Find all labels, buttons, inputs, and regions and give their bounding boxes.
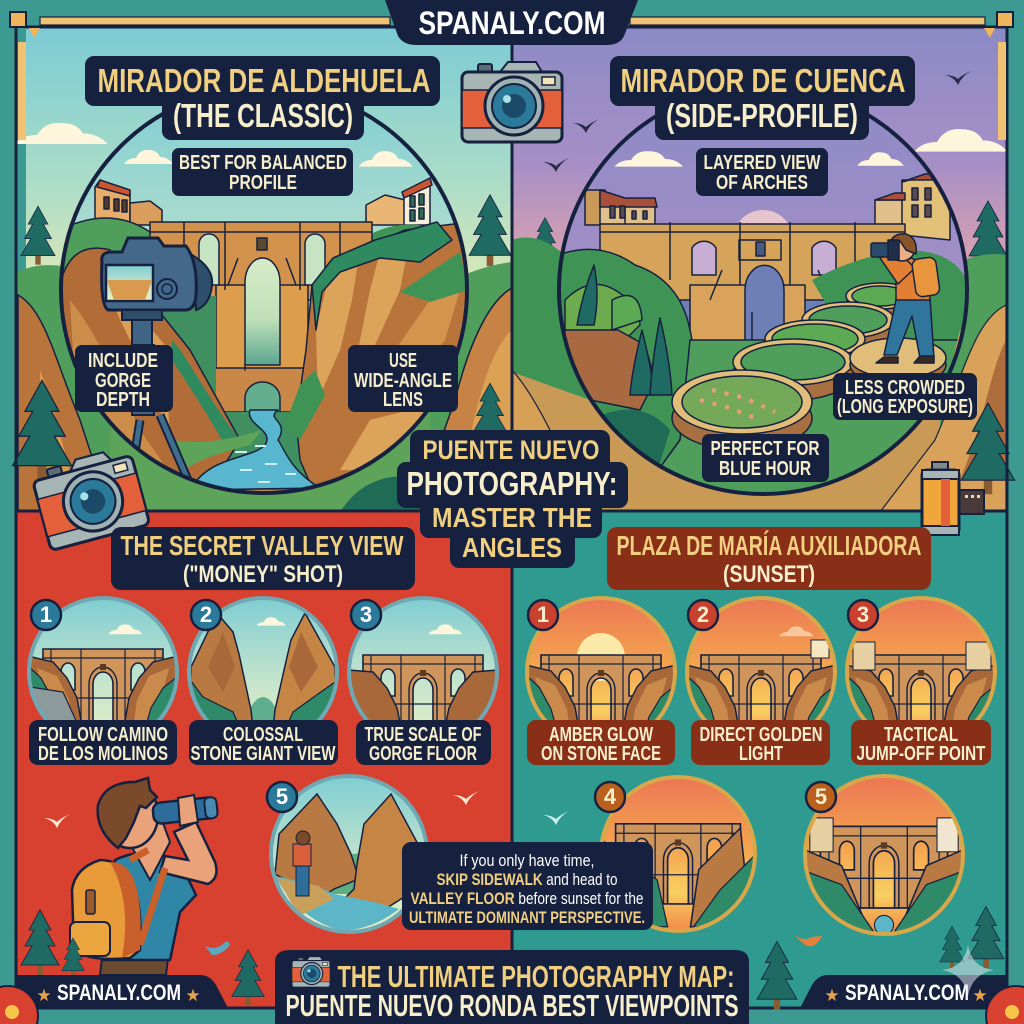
bottom banner: THE ULTIMATE PHOTOGRAPHY MAP: xyxy=(338,959,734,994)
caption: direct golden light xyxy=(691,720,830,765)
step circle: sunset 3 xyxy=(845,596,997,720)
icon: trees bottom xyxy=(21,907,1004,1010)
label: best for balanced profile: BEST FOR BALANCED xyxy=(179,152,347,174)
bottom banner xyxy=(275,950,749,1024)
bottom-right brand tag xyxy=(800,975,1024,1024)
caption: amber glow xyxy=(527,720,675,765)
illustration: hiker with binoculars xyxy=(70,778,218,975)
bottom-left brand tag xyxy=(0,975,228,1024)
callout: VALLEY FLOOR before sunset for the xyxy=(410,889,644,908)
heading: The Secret Valley View: THE SECRET VALLEY VIEW xyxy=(120,530,404,561)
gorge floor greenery xyxy=(160,296,310,490)
label: include gorge depth: DEPTH xyxy=(96,389,150,411)
label: use wide-angle lens xyxy=(348,345,458,412)
caption: direct golden light: LIGHT xyxy=(739,743,783,765)
step circle: valley 3 xyxy=(347,596,499,720)
label: less crowded: LESS CROWDED xyxy=(845,377,965,399)
label: layered view of arches: LAYERED VIEW xyxy=(704,152,821,174)
step circle: sunset 2 xyxy=(685,596,837,720)
caption: amber glow: ON STONE FACE xyxy=(541,743,661,765)
icon: birds xyxy=(44,791,822,955)
caption: amber glow: AMBER GLOW xyxy=(549,724,653,746)
step badges: sunset: 5 xyxy=(815,784,827,809)
circle scene: Cuenca view xyxy=(558,85,970,495)
panel: Mirador de Aldehuela scene xyxy=(13,28,512,512)
right gorge cliff xyxy=(296,222,470,495)
top brand tab xyxy=(385,0,638,45)
label: perfect for blue hour: PERFECT FOR xyxy=(710,438,820,460)
left town buildings xyxy=(95,180,162,225)
label: include gorge depth: INCLUDE xyxy=(88,350,158,372)
bottom-left brand tag: SPANALY.COM xyxy=(57,980,181,1005)
heading: The Secret Valley View xyxy=(111,527,415,590)
callout xyxy=(402,842,653,930)
step badges: valley: 3 xyxy=(360,602,372,627)
buildings xyxy=(585,190,657,225)
callout: SKIP SIDEWALK and head to xyxy=(436,870,618,889)
label: layered view of arches: OF ARCHES xyxy=(716,172,808,194)
bottom-right brand tag: SPANALY.COM xyxy=(845,980,969,1005)
step circle: sunset 5 xyxy=(804,776,964,934)
tripod camera xyxy=(102,238,212,484)
heading: Mirador de Aldehuela xyxy=(85,56,440,140)
heading: central title: PUENTE NUEVO xyxy=(422,435,600,465)
icon: top camera xyxy=(462,62,562,142)
caption: tactical jump-off: TACTICAL xyxy=(884,724,958,746)
heading: Mirador de Cuenca: (SIDE-PROFILE) xyxy=(666,97,858,134)
caption: tactical jump-off: JUMP-OFF POINT xyxy=(856,743,986,765)
step badges: valley xyxy=(31,600,381,812)
heading: The Secret Valley View: ("MONEY" SHOT) xyxy=(183,561,343,588)
heading: Mirador de Aldehuela: MIRADOR DE ALDEHUELA xyxy=(98,62,430,99)
caption: follow camino: DE LOS MOLINOS xyxy=(38,743,168,765)
step circle: valley 1 xyxy=(27,596,179,720)
heading: Mirador de Aldehuela: (THE CLASSIC) xyxy=(173,97,353,134)
label: best for balanced profile: PROFILE xyxy=(229,172,297,194)
step badges: sunset: 4 xyxy=(604,784,617,809)
label: include gorge depth xyxy=(75,345,173,412)
person xyxy=(871,234,940,363)
left greenery xyxy=(561,248,693,464)
step badges: sunset xyxy=(528,600,878,812)
step badges: valley: 2 xyxy=(200,602,212,627)
caption: colossal xyxy=(189,720,338,765)
icon: birds purple sky xyxy=(543,71,971,172)
terraces xyxy=(672,283,946,450)
circle scene: Aldehuela view xyxy=(60,85,470,500)
caption: direct golden light: DIRECT GOLDEN xyxy=(700,724,822,746)
caption: follow camino xyxy=(29,720,177,765)
heading: Plaza de María Auxiliadora: (SUNSET) xyxy=(723,561,815,588)
bridge xyxy=(150,222,372,412)
caption: follow camino: FOLLOW CAMINO xyxy=(38,724,168,746)
heading: Plaza de María Auxiliadora xyxy=(607,527,931,590)
label: best for balanced profile xyxy=(172,148,353,196)
left gorge cliff xyxy=(60,248,240,495)
icon: film canister xyxy=(922,462,984,535)
label: include gorge depth: GORGE xyxy=(95,370,151,392)
heading: central title: MASTER THE xyxy=(432,502,592,533)
caption: true scale xyxy=(356,720,491,765)
step badges: sunset: 2 xyxy=(697,602,709,627)
heading: central title: PHOTOGRAPHY: xyxy=(406,465,618,502)
right lower ground xyxy=(661,339,958,492)
bottom banner: PUENTE NUEVO RONDA BEST VIEWPOINTS xyxy=(286,988,738,1023)
caption: colossal: STONE GIANT VIEW xyxy=(190,743,336,765)
bottom-left brand tag: ★ xyxy=(36,986,52,1006)
bridge xyxy=(600,222,905,345)
heading: Mirador de Cuenca: MIRADOR DE CUENCA xyxy=(620,62,906,99)
right town buildings xyxy=(366,178,432,225)
step circle: valley 2 xyxy=(187,596,339,720)
caption: colossal: COLOSSAL xyxy=(223,724,303,746)
callout: If you only have time, xyxy=(460,851,594,870)
label: use wide-angle lens: LENS xyxy=(383,389,423,411)
label: use wide-angle lens: USE xyxy=(389,350,417,372)
step badges: sunset: 3 xyxy=(857,602,869,627)
bottom-right brand tag: ★ xyxy=(824,986,840,1006)
caption: true scale: GORGE FLOOR xyxy=(369,743,477,765)
heading: central title: ANGLES xyxy=(462,532,562,563)
panel: Secret Valley red background xyxy=(17,512,512,1008)
panel: Plaza de María Auxiliadora teal background xyxy=(512,512,1006,1008)
caption: tactical jump-off xyxy=(851,720,991,765)
label: layered view of arches xyxy=(696,148,828,196)
step circle: sunset 4 xyxy=(600,777,756,931)
icon: lower-left camera xyxy=(30,445,150,551)
label: less crowded xyxy=(833,373,977,420)
step badges: valley: 1 xyxy=(40,602,52,627)
step badges: valley: 5 xyxy=(276,784,288,809)
heading: Mirador de Cuenca xyxy=(610,56,915,140)
bottom-right brand tag: ★ xyxy=(972,986,988,1006)
label: perfect for blue hour: BLUE HOUR xyxy=(719,458,811,480)
label: perfect for blue hour xyxy=(702,434,829,482)
panel: Mirador de Cuenca scene xyxy=(512,28,1015,512)
river xyxy=(190,410,320,490)
label: use wide-angle lens: WIDE-ANGLE xyxy=(354,370,452,392)
step circle: sunset 1 xyxy=(525,596,677,720)
watermark sparkle xyxy=(942,945,994,996)
step circle: valley 5 xyxy=(271,776,427,932)
callout: ULTIMATE DOMINANT PERSPECTIVE. xyxy=(409,908,645,927)
bottom-left brand tag: ★ xyxy=(185,986,201,1006)
label: less crowded: (LONG EXPOSURE) xyxy=(837,396,973,418)
step badges: sunset: 1 xyxy=(537,602,549,627)
heading: central title xyxy=(397,430,628,568)
top brand tab: SPANALY.COM xyxy=(418,5,606,41)
caption: true scale: TRUE SCALE OF xyxy=(364,724,482,746)
